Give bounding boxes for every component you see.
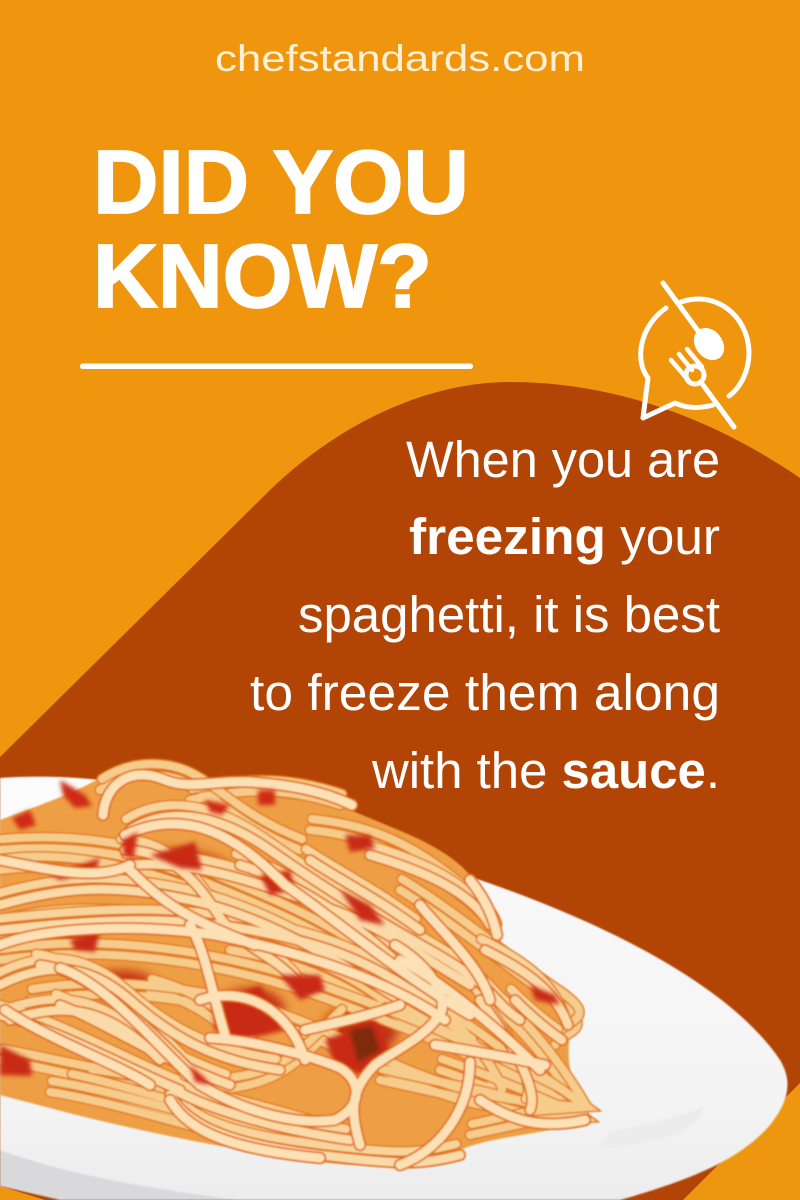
strands back layer <box>0 764 587 1150</box>
pasta mound base <box>0 772 590 1166</box>
orange corner bottom left <box>0 1186 45 1200</box>
divider line <box>80 364 473 369</box>
white plate <box>0 777 787 1200</box>
body text: freezing your <box>409 508 720 565</box>
website address: chefstandards.com <box>215 38 585 79</box>
sauce shadows <box>24 850 398 1056</box>
strands front layer <box>0 775 585 1165</box>
icon: no utensils speech bubble <box>641 283 749 427</box>
body text: When you are <box>406 431 720 488</box>
title <box>93 133 469 327</box>
small sauce pieces on top <box>12 780 380 1085</box>
title: DID YOU <box>93 133 469 233</box>
body text: to freeze them along <box>250 664 720 721</box>
body text: spaghetti, it is best <box>298 586 720 643</box>
brown curved panel <box>0 382 800 1200</box>
sauce chunks under front strands <box>0 835 560 1076</box>
orange corner bottom right <box>683 1083 800 1200</box>
title: KNOW? <box>93 227 432 327</box>
strands mid layer <box>0 805 568 1162</box>
spaghetti with sauce <box>0 764 590 1166</box>
body text: with the sauce. <box>371 742 720 799</box>
body text <box>250 431 720 799</box>
